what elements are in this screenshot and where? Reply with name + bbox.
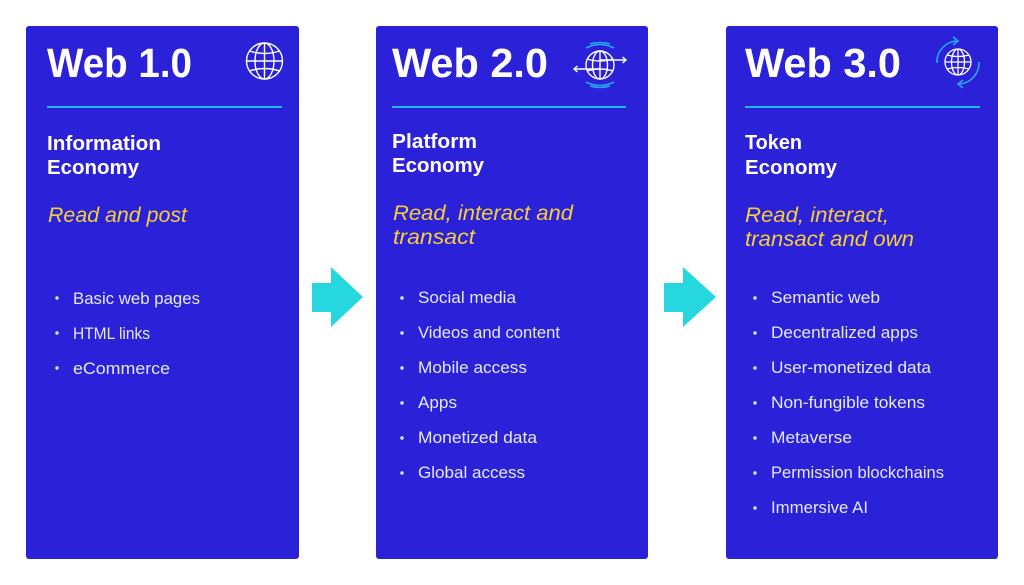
subheading: Platform Economy: Platform bbox=[392, 130, 477, 153]
bullet list: Web 3.0 features: User-monetized data bbox=[771, 358, 932, 377]
heading: Web 2.0: Web 2.0 bbox=[392, 40, 548, 86]
heading: Web 1.0: Web 1.0 bbox=[47, 40, 192, 86]
subheading: Token Economy: Token bbox=[745, 131, 802, 154]
bullet list: Web 3.0 features: Non-fungible tokens bbox=[771, 393, 925, 412]
subheading: Token Economy bbox=[745, 131, 838, 179]
tagline: Read, interact and transact: transact bbox=[393, 226, 476, 249]
bullet list: Web 2.0 features: Apps bbox=[418, 393, 457, 412]
bullet list: Web 1.0 features bbox=[55, 289, 200, 378]
bullet list: Web 1.0 features: Basic web pages bbox=[73, 289, 200, 308]
bullet list: Web 2.0 features: Mobile access bbox=[418, 358, 527, 377]
tagline: Read and post: Read and post bbox=[48, 204, 188, 227]
icon: globe bbox=[246, 43, 282, 79]
icon: globe with arrows bbox=[574, 42, 626, 88]
tagline: Read, interact, transact and own: transact and own bbox=[745, 228, 914, 251]
tagline: Read, interact and transact bbox=[393, 202, 574, 249]
bullet list: Web 2.0 features: Videos and content bbox=[418, 323, 560, 342]
bullet list: Web 3.0 features: Immersive AI bbox=[771, 498, 868, 517]
icon: globe with cycle arrows bbox=[937, 37, 979, 88]
panel: Web 1.0 bbox=[26, 26, 299, 559]
bullet list: Web 1.0 features: HTML links bbox=[73, 324, 150, 343]
subheading: Platform Economy bbox=[392, 130, 485, 177]
bullet list: Web 3.0 features: Permission blockchains bbox=[771, 463, 944, 482]
arrow: Web 2.0 to Web 3.0 bbox=[664, 267, 716, 327]
subheading: Information Economy: Economy bbox=[47, 156, 140, 179]
bullet list: Web 3.0 features: Metaverse bbox=[771, 428, 852, 447]
tagline: Read, interact, transact and own: Read, interact, bbox=[745, 204, 889, 227]
bullet list: Web 1.0 features: eCommerce bbox=[73, 359, 170, 378]
panel: Web 3.0 bbox=[726, 26, 998, 559]
bullet list: Web 2.0 features: Global access bbox=[418, 463, 525, 482]
subheading: Information Economy bbox=[47, 132, 161, 179]
subheading: Information Economy: Information bbox=[47, 132, 161, 155]
bullet list: Web 3.0 features: Semantic web bbox=[771, 288, 880, 307]
subheading: Platform Economy: Economy bbox=[392, 154, 485, 177]
tagline: Read, interact and transact: Read, interact and bbox=[393, 202, 574, 225]
arrow: Web 1.0 to Web 2.0 bbox=[312, 267, 363, 327]
bullet list: Web 2.0 features: Social media bbox=[418, 288, 517, 307]
bullet list: Web 2.0 features bbox=[400, 288, 560, 482]
panel: Web 2.0 bbox=[376, 26, 648, 559]
heading: Web 3.0: Web 3.0 bbox=[745, 40, 901, 86]
subheading: Token Economy: Economy bbox=[745, 156, 838, 179]
bullet list: Web 2.0 features: Monetized data bbox=[418, 428, 538, 447]
bullet list: Web 3.0 features bbox=[753, 288, 944, 517]
tagline: Read, interact, transact and own bbox=[745, 204, 914, 251]
bullet list: Web 3.0 features: Decentralized apps bbox=[771, 323, 918, 342]
